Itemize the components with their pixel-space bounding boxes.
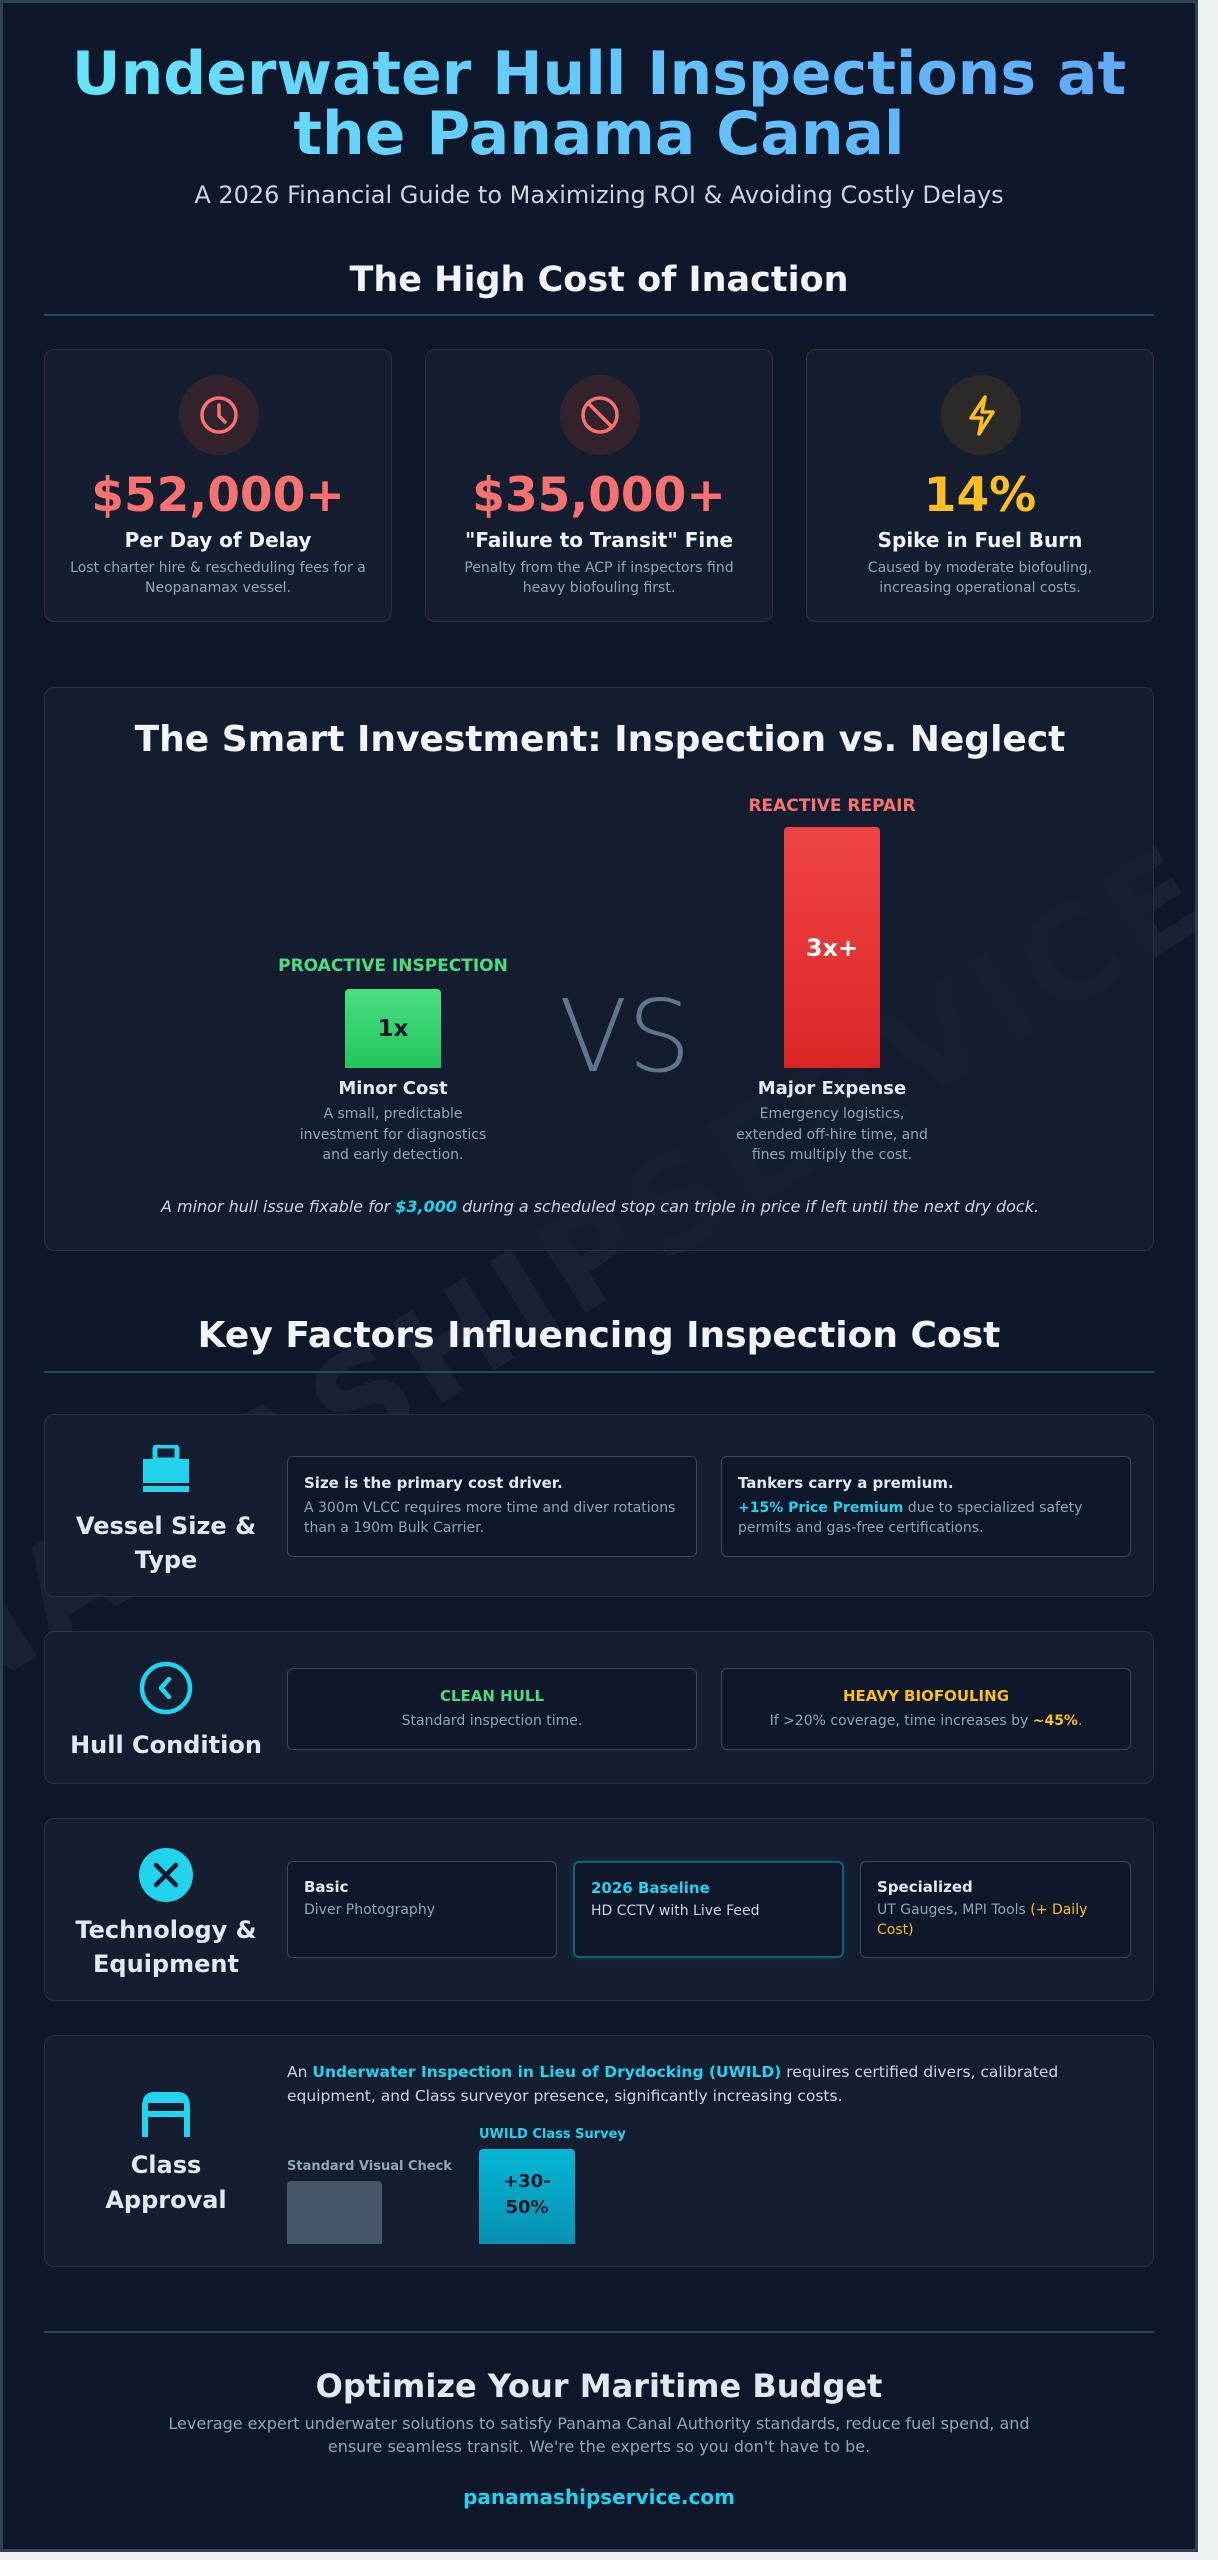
icon: circle chevron bbox=[140, 1662, 192, 1714]
card: delay: Per Day of Delay bbox=[125, 528, 311, 552]
box: tankers bbox=[721, 1456, 1131, 1557]
panel: smart investment bbox=[44, 687, 1154, 1251]
footer heading: Optimize Your Maritime Budget bbox=[316, 2367, 882, 2405]
bar: 3x+ bbox=[784, 827, 880, 1068]
chart: uwild: 50% bbox=[505, 2197, 549, 2218]
footer url: panamashipservice.com bbox=[463, 2485, 735, 2509]
panel: hull condition: Hull Condition bbox=[70, 1731, 262, 1759]
proactive column bbox=[278, 956, 508, 1163]
box: tankers: +15% Price Premium due to specialized safety permits and gas-free certifications. bbox=[738, 1500, 1082, 1536]
panel: hull condition bbox=[44, 1631, 1154, 1784]
card: fuel: Spike in Fuel Burn bbox=[878, 528, 1082, 552]
box: clean: CLEAN HULL bbox=[440, 1687, 544, 1705]
box: heavy bbox=[721, 1668, 1131, 1750]
reactive column: REACTIVE REPAIR bbox=[748, 796, 916, 816]
card: fine: "Failure to Transit" Fine bbox=[465, 528, 733, 552]
card: fine: heavy biofouling first. bbox=[523, 580, 675, 596]
title: Underwater Hull Inspections at bbox=[72, 39, 1126, 109]
icon: seat bbox=[142, 2092, 190, 2137]
proactive column: investment for diagnostics bbox=[300, 1126, 486, 1142]
footer text: Leverage expert underwater solutions to satisfy Panama Canal Authority standards, reduce fuel spend, and ensure seamless transit. We're the experts so you don't have to be. bbox=[168, 2414, 1030, 2456]
reactive column: Major Expense bbox=[758, 1078, 906, 1099]
box: heavy: If >20% coverage, time increases by ~45%. bbox=[770, 1713, 1082, 1729]
icon: clock bbox=[179, 375, 259, 455]
card: delay bbox=[44, 349, 392, 622]
chart: uwild bbox=[479, 2127, 626, 2244]
proactive column: PROACTIVE INSPECTION bbox=[278, 956, 508, 976]
title: the Panama Canal bbox=[293, 99, 905, 169]
box: specialized: Specialized bbox=[877, 1878, 973, 1896]
box: size: A 300m VLCC requires more time and diver rotations than a 190m Bulk Carrier. bbox=[304, 1500, 675, 1536]
footnote: A minor hull issue fixable for $3,000 during a scheduled stop can triple in price if left until the next dry dock. bbox=[161, 1197, 1039, 1216]
box: clean: Standard inspection time. bbox=[402, 1713, 582, 1729]
chart: uwild: +30- bbox=[503, 2171, 551, 2192]
icon: ban bbox=[560, 375, 640, 455]
box: baseline: HD CCTV with Live Feed bbox=[591, 1903, 759, 1919]
icon: weight bbox=[143, 1445, 189, 1492]
panel: technology bbox=[44, 1818, 1154, 2001]
box: size bbox=[287, 1456, 697, 1557]
proactive column: and early detection. bbox=[323, 1147, 463, 1163]
card: delay: Lost charter hire & rescheduling fees for a bbox=[70, 560, 366, 576]
title bbox=[0, 44, 1198, 164]
box: specialized bbox=[860, 1861, 1131, 1958]
bar: 3x+: 3x+ bbox=[806, 934, 858, 962]
reactive column: fines multiply the cost. bbox=[752, 1147, 912, 1163]
icon: bolt bbox=[941, 375, 1021, 455]
card: fuel: increasing operational costs. bbox=[879, 580, 1081, 596]
box: basic bbox=[287, 1861, 557, 1958]
card: fine: Penalty from the ACP if inspectors find bbox=[464, 560, 734, 576]
heading: key factors: Key Factors Influencing Inspection Cost bbox=[198, 1315, 1000, 1356]
heading: The Smart Investment: Inspection vs. Neglect bbox=[135, 719, 1065, 760]
proactive column: Minor Cost bbox=[338, 1078, 448, 1099]
card: fine: $35,000+ bbox=[472, 468, 726, 523]
box: baseline bbox=[573, 1861, 844, 1958]
chart: standard bbox=[287, 2159, 452, 2244]
chart: uwild: UWILD Class Survey bbox=[479, 2127, 626, 2142]
card: fine bbox=[425, 349, 773, 622]
reactive column bbox=[736, 796, 928, 1163]
panel: vessel size bbox=[44, 1414, 1154, 1597]
title bbox=[76, 1512, 256, 1574]
box: tankers: Tankers carry a premium. bbox=[738, 1474, 954, 1492]
box: baseline: 2026 Baseline bbox=[591, 1879, 710, 1897]
heading: high cost: The High Cost of Inaction bbox=[349, 260, 849, 300]
box: basic: Basic bbox=[304, 1878, 349, 1896]
icon: x circle bbox=[139, 1848, 193, 1902]
bar: 1x: 1x bbox=[378, 1016, 408, 1042]
proactive column: A small, predictable bbox=[323, 1106, 463, 1122]
panel: technology: Technology & bbox=[75, 1916, 257, 1944]
card: fuel: Caused by moderate biofouling, bbox=[868, 560, 1092, 576]
box: basic: Diver Photography bbox=[304, 1902, 435, 1918]
stat: $52,000+ bbox=[91, 468, 345, 523]
reactive column: Emergency logistics, bbox=[760, 1106, 904, 1122]
card: delay: Neopanamax vessel. bbox=[145, 580, 291, 596]
chart: standard: Standard Visual Check bbox=[287, 2159, 452, 2174]
text: An Underwater Inspection in Lieu of Drydocking (UWILD) requires certified divers, calibrated equipment, and Class surveyor presence, significantly increasing costs. bbox=[287, 2063, 1058, 2105]
title: Type bbox=[135, 1546, 197, 1574]
VS: VS bbox=[559, 978, 691, 1095]
box: size: Size is the primary cost driver. bbox=[304, 1474, 563, 1492]
card: fuel bbox=[806, 349, 1154, 622]
bar: 1x bbox=[345, 989, 441, 1068]
box: specialized: UT Gauges, MPI Tools (+ Daily Cost) bbox=[877, 1902, 1087, 1938]
panel: technology: Equipment bbox=[93, 1950, 239, 1978]
box: heavy: HEAVY BIOFOULING bbox=[843, 1687, 1009, 1705]
reactive column: extended off-hire time, and bbox=[736, 1126, 928, 1142]
subtitle: A 2026 Financial Guide to Maximizing ROI & Avoiding Costly Delays bbox=[194, 181, 1004, 209]
panel: class approval: Class bbox=[131, 2151, 201, 2179]
panel: class approval: Approval bbox=[105, 2186, 227, 2214]
card: fuel: 14% bbox=[924, 468, 1036, 523]
box: clean bbox=[287, 1668, 697, 1750]
panel: class approval bbox=[44, 2035, 1154, 2267]
title: Vessel Size & bbox=[76, 1512, 256, 1540]
